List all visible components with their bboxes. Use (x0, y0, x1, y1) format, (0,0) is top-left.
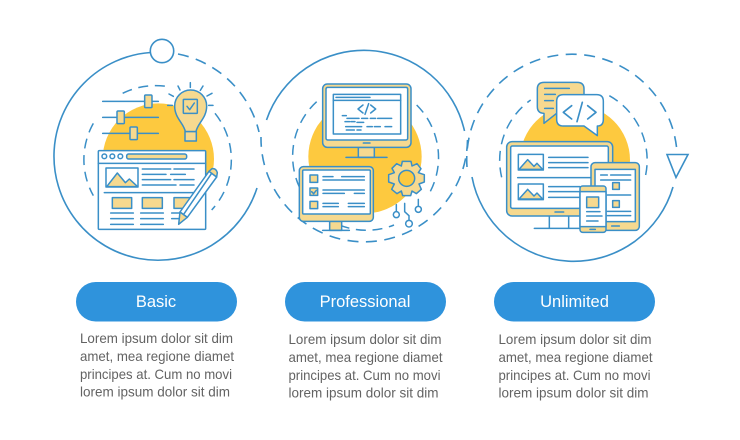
icon: chat bubbles (537, 82, 603, 136)
text block: Unlimited description: Lorem ipsum dolor sit dim (498, 332, 652, 347)
pill: Unlimited: Unlimited (540, 293, 609, 311)
text block: Basic description (80, 331, 234, 400)
icon: gear (389, 161, 424, 196)
icon: basic web page design (84, 83, 231, 229)
pill: Professional (285, 282, 446, 322)
text block: Professional description: amet, mea regione diamet (288, 350, 443, 365)
icon: large monitor with code (323, 84, 411, 157)
text block: Unlimited description (498, 332, 653, 400)
column: Unlimited (494, 282, 655, 400)
icon: tablet (591, 163, 639, 230)
icon: small monitor with checklist (299, 167, 373, 230)
icon: pencil (179, 169, 217, 224)
text block: Professional description: Lorem ipsum dolor sit dim (288, 332, 442, 347)
text block: Basic description: lorem ipsum dolor sit dim (80, 384, 230, 400)
icon: desktop monitor (507, 142, 613, 228)
text block: Unlimited description: lorem ipsum dolor sit dim (498, 386, 648, 400)
text block: Professional description: principes at. Cum no movi (288, 368, 440, 383)
icon: phone (580, 186, 606, 232)
text block: Professional description (288, 332, 443, 400)
icon: light bulb (168, 83, 213, 141)
text block: Basic description: principes at. Cum no movi (80, 367, 232, 382)
icon: browser window (98, 151, 206, 229)
pill: Unlimited (494, 282, 655, 322)
pill: Basic (76, 282, 237, 322)
circle 1 ring (54, 39, 259, 260)
text block: Professional description: lorem ipsum dolor sit dim (288, 386, 438, 400)
text block: Unlimited description: principes at. Cum no movi (498, 368, 650, 383)
icon: unlimited responsive devices (500, 82, 647, 232)
text block: Unlimited description: amet, mea regione diamet (498, 350, 653, 365)
text block: Basic description: amet, mea regione diamet (80, 349, 234, 364)
column: Basic (76, 282, 237, 400)
icon: sliders (103, 95, 158, 140)
column: Professional (285, 282, 446, 400)
icon: circuit nodes (393, 199, 421, 227)
icon: professional monitors and gear (293, 84, 439, 230)
circle 2 ring (261, 50, 468, 242)
pill: Basic: Basic (136, 293, 176, 311)
circle 3 ring with arrow (467, 54, 688, 261)
pill: Professional: Professional (320, 293, 410, 311)
text block: Basic description: Lorem ipsum dolor sit dim (80, 331, 233, 346)
